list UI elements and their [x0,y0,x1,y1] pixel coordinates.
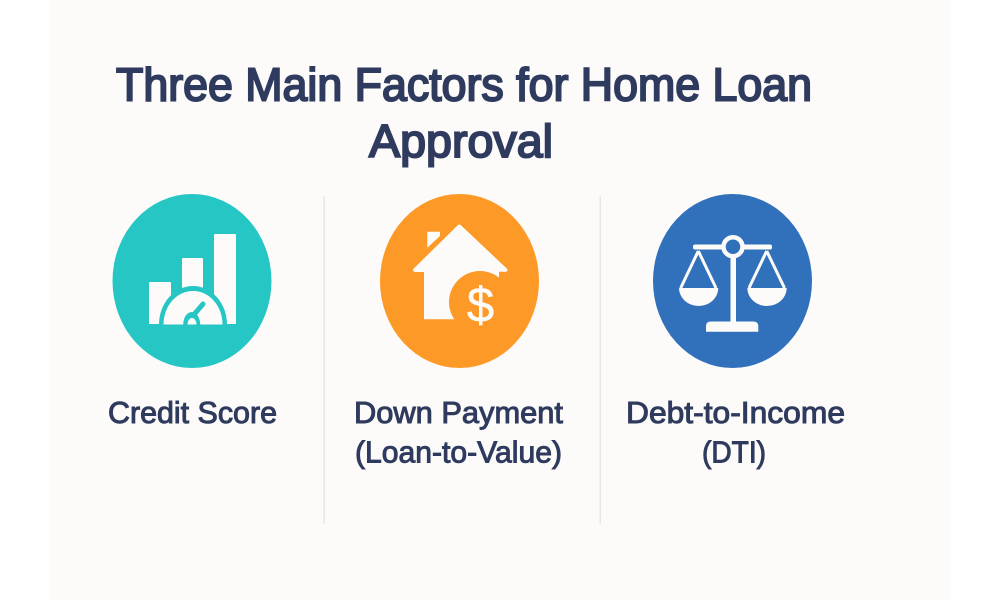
title: Three Main Factors for Home Loan [116,58,812,110]
label: debt to income: Debt-to-Income [626,396,845,430]
panel: credit score [108,194,277,430]
icon: house with dollar [380,194,539,368]
icon: balance scale [653,194,812,368]
label: credit score: Credit Score [108,396,277,430]
label: down payment [354,396,564,470]
label: debt to income: (DTI) [702,436,766,470]
title [116,58,812,167]
panel: down payment [354,194,564,470]
icon: credit score bars and gauge [112,194,272,368]
label: down payment: Down Payment [354,396,564,430]
label: down payment: (Loan-to-Value) [355,436,562,470]
title: Approval [369,115,553,167]
label: debt to income [626,396,845,470]
panel: debt to income [626,194,845,470]
icon: dollar sign: $ [467,278,494,332]
